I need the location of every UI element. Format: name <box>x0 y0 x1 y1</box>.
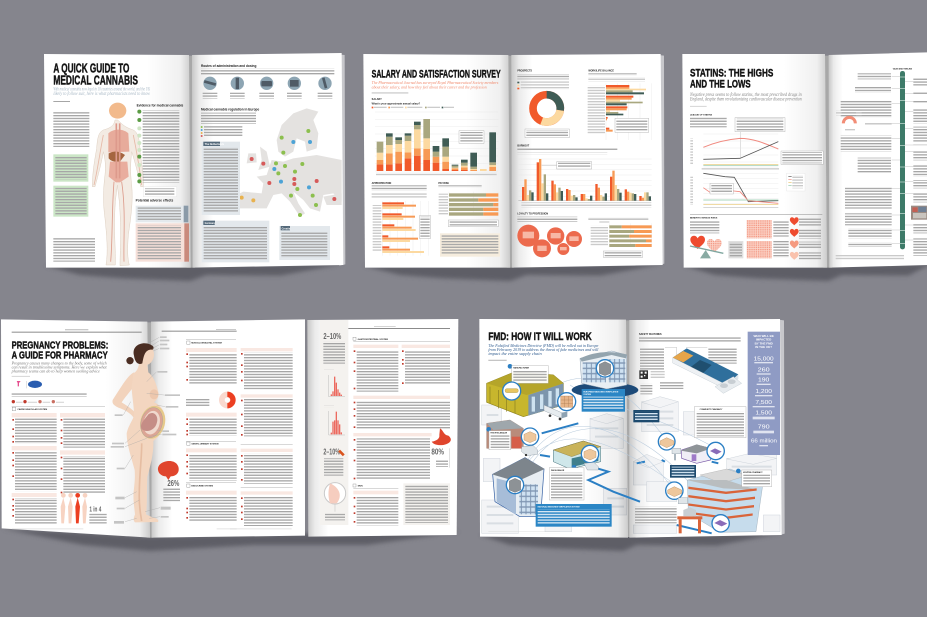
heartburn band <box>353 433 432 480</box>
brain icon <box>158 461 179 480</box>
stomach icon <box>432 428 451 445</box>
section rule <box>690 213 822 215</box>
callout: patent <box>710 183 733 194</box>
adverse box: serious <box>136 223 189 262</box>
feature text: anti tamper <box>686 347 737 364</box>
column 3 urinary <box>186 448 237 481</box>
subtitle: impact the entire supply chain <box>488 351 542 356</box>
green box: what is cannabis <box>53 154 88 182</box>
route icons <box>203 77 332 99</box>
subtitle <box>11 361 107 374</box>
references <box>635 507 677 523</box>
timeline connectors <box>892 77 913 243</box>
title: AND THE LOWS <box>690 79 751 91</box>
navy callout: hospital <box>670 465 696 478</box>
icon circle: pack hospital <box>712 515 729 532</box>
pay rise heading <box>438 182 482 188</box>
hospital building <box>687 469 763 532</box>
panel: germany <box>202 221 269 262</box>
stat: 80%: 80% <box>431 446 444 456</box>
column 4 <box>241 348 293 526</box>
icon: scales with hearts <box>690 236 723 258</box>
callout: appropriate pay <box>419 216 431 238</box>
icon circle: server 2 <box>506 476 524 494</box>
burnout heading <box>517 144 617 151</box>
callout: hospital pharmacy: HOSPITAL PHARMACY <box>743 471 763 474</box>
community pharmacy callout: COMMUNITY PHARMACY <box>700 408 723 411</box>
spread: pregnancy problems page three <box>307 319 458 537</box>
section: skin: SKIN <box>358 486 363 488</box>
timeline heading: TALES AND TIMELINE <box>893 67 913 70</box>
column 2 left <box>60 413 105 493</box>
column 2 bullets <box>61 419 62 493</box>
icon circle: server <box>596 360 614 377</box>
spine figures <box>61 493 87 523</box>
title: FMD: HOW IT WILL WORK <box>488 331 592 343</box>
spread: fmd how it will work <box>479 319 785 551</box>
salary legend <box>372 107 454 108</box>
wholesaler small building <box>487 420 523 448</box>
section: gastrointestinal <box>353 337 450 342</box>
grey stat box <box>728 241 743 258</box>
callout: guidance <box>735 118 785 158</box>
references box <box>403 483 450 525</box>
statin use intro <box>690 114 727 127</box>
pie caption <box>186 398 209 406</box>
pay rise stacked bars <box>439 192 498 216</box>
box: national verification: NATIONAL MEDICINES VERIFICATION SYSTEM <box>538 506 580 509</box>
stat: 2–10% second <box>323 447 345 476</box>
subtitle: With medical cannabis now legal in 10 countries around the world, and the UK <box>53 87 150 92</box>
evidence legend <box>143 187 177 197</box>
panel: who will be impacted: 1,200 <box>755 389 772 395</box>
byline <box>690 105 707 107</box>
stat: 26% <box>163 479 180 501</box>
adverse effects heading: Potential adverse effects <box>136 199 173 203</box>
illustration: pregnant woman <box>112 343 169 522</box>
evidence list <box>137 110 179 183</box>
subtitle: can result in troublesome symptoms. Here we explain what <box>12 365 107 370</box>
box: methodology <box>440 233 500 257</box>
gauge chart <box>836 111 862 131</box>
feature text: unique identifier <box>640 347 677 370</box>
panel: who will be impacted: WHO WILL BE <box>753 334 774 338</box>
icon circle: box 3 <box>658 433 675 450</box>
evidence heading: Evidence for medical cannabis <box>137 103 183 107</box>
pie chart 26% <box>219 392 236 408</box>
line chart legend <box>787 173 805 191</box>
title <box>690 67 773 91</box>
page stack edge <box>658 55 664 265</box>
callout: pay rise <box>448 220 498 227</box>
section: genito urinary <box>186 441 236 446</box>
column 1 left <box>12 413 57 525</box>
box: national verification <box>536 504 612 527</box>
circle illustration: belly <box>324 483 346 520</box>
spread: pregnancy problems pages one and two <box>1 319 460 551</box>
subtitle: England, despite them revolutionising cardiovascular disease prevention <box>689 98 802 103</box>
green box: cbd <box>53 186 88 217</box>
routes heading: Routes of administration and dosing <box>201 64 256 68</box>
icon circle: box <box>521 428 539 445</box>
section: skin <box>353 484 398 489</box>
box: european verification: SYSTEM <box>583 394 591 396</box>
intro text <box>12 392 87 397</box>
spread: statins the highs and the lows <box>682 52 927 281</box>
icon circle: box 4 <box>666 482 683 499</box>
footer page two <box>230 529 292 530</box>
histogram b <box>324 406 345 435</box>
van <box>522 446 538 456</box>
references <box>53 238 95 262</box>
panel: the netherlands: The Netherlands <box>205 143 225 146</box>
regulation heading: Medical cannabis regulation in Europe <box>201 107 259 111</box>
orange pavilion <box>677 507 702 533</box>
background city <box>482 397 780 533</box>
spread: salary and satisfaction survey <box>363 54 664 281</box>
recommend heading <box>588 217 648 223</box>
column 1 bullets <box>12 419 14 517</box>
map markers <box>240 129 336 217</box>
appropriate pay bar chart <box>373 201 428 256</box>
subtitle: Negative press seems to follow statins, the most prescribed drugs in <box>689 93 802 98</box>
title: STATINS: THE HIGHS <box>690 67 773 79</box>
qr captions <box>640 370 683 394</box>
adverse box: common <box>136 206 188 222</box>
delivery routes <box>517 378 718 533</box>
salary heading <box>372 98 421 105</box>
icon circle: box 2 <box>581 445 599 463</box>
safety features heading <box>639 333 741 343</box>
timeline bar <box>900 71 905 249</box>
stat: 2–10%: 2–10% <box>323 332 341 341</box>
callout: wholesaler <box>486 427 511 450</box>
panel: who will be impacted: 15,000 <box>754 356 774 362</box>
panel: the netherlands <box>202 142 240 215</box>
salary heading: SALARY <box>372 98 382 101</box>
callout: manufacturer <box>508 364 548 383</box>
work life bar chart <box>588 83 652 140</box>
work life balance heading: WORK/LIFE BALANCE <box>588 69 614 72</box>
van 4 <box>678 498 688 504</box>
subtitle: pharmacy teams can do to help women seeking advice <box>11 369 100 374</box>
byline <box>372 92 408 93</box>
work life balance heading <box>588 69 637 76</box>
panel: who will be impacted: 190 <box>758 377 769 383</box>
burnout heading: BURNOUT <box>517 144 530 147</box>
spread: a quick guide to medical cannabis: likely to follow suit, here is what pharmacists need to know <box>53 92 151 97</box>
sponsor logos <box>17 381 42 388</box>
safety features heading: SAFETY FEATURES <box>639 333 662 336</box>
title: A QUICK GUIDE TO <box>53 61 129 75</box>
callout: work life <box>615 118 649 132</box>
panel: croatia: Croatia <box>282 227 291 230</box>
subtitle: The Pharmaceutical Journal has surveyed Royal Pharmaceutical Society members <box>372 80 499 85</box>
dot grid captions <box>773 220 789 258</box>
section: endocrine: ENDOCRINE SYSTEM <box>191 486 213 488</box>
navy callout: community <box>633 410 659 422</box>
panel: who will be impacted: BY THE FMD <box>755 341 774 345</box>
body illustration <box>92 103 143 266</box>
prospects heading: PROSPECTS <box>517 70 532 73</box>
panel: who will be impacted: 1,500 <box>755 411 772 417</box>
title: SALARY AND SATISFACTION SURVEY <box>372 68 501 80</box>
header rule <box>12 328 237 333</box>
icon circle: pallet <box>558 393 576 411</box>
benefits heading: BENEFITS VERSUS RISKS <box>690 217 718 219</box>
appropriate pay heading <box>372 182 427 191</box>
header rule <box>348 325 450 329</box>
work life legend <box>588 77 645 82</box>
panel: who will be impacted: IMPACTED <box>756 338 772 342</box>
stat: 26%: 26% <box>167 479 179 488</box>
pharmacy shop <box>681 444 712 463</box>
panel: germany: Germany <box>205 222 216 225</box>
teal warehouse <box>553 441 601 469</box>
panel: who will be impacted <box>748 332 780 455</box>
loyalty heading: LOYALTY TO PROFESSION <box>517 213 548 216</box>
europe map <box>237 108 342 217</box>
heart icons <box>790 217 799 260</box>
subtitle: Pregnancy causes many changes to the body, some of which <box>11 361 107 367</box>
section: genito urinary: GENITO-URINARY SYSTEM <box>191 443 219 446</box>
subtitle: from February 2019 to address the threat of fake medicines and will <box>488 347 599 352</box>
bubble chart <box>517 225 582 257</box>
haemorrhoids band <box>353 396 450 429</box>
subtitle <box>488 343 599 356</box>
section: gastrointestinal: GASTROINTESTINAL SYSTEM <box>358 338 388 341</box>
stat: 2–10% <box>323 332 345 364</box>
icon circle: pack <box>503 382 521 400</box>
stat: 1 in 4: 1 in 4 <box>89 505 102 514</box>
legend <box>12 400 64 403</box>
callout: nice guidance <box>781 151 823 164</box>
map legend <box>201 126 242 137</box>
title: MEDICAL CANNABIS <box>53 73 138 87</box>
callout: hospital pharmacy <box>736 469 772 487</box>
callout: prospects <box>525 129 569 138</box>
anatomy labels <box>111 336 180 524</box>
manufacturer building <box>487 372 563 417</box>
stat: 1 in 4 <box>89 505 107 524</box>
subtitle: about their salary, and how they feel about their career and the profession <box>372 84 487 90</box>
title <box>12 340 108 361</box>
footer <box>488 532 560 533</box>
prospects legend <box>517 81 569 90</box>
ellipse plinth <box>572 382 638 398</box>
callout: recommend <box>603 251 643 257</box>
loyalty heading <box>517 213 577 222</box>
section: cardiovascular system <box>12 406 105 411</box>
statin use intro: LEAGUE OF STATINS <box>690 114 713 117</box>
column 3 bullets a <box>186 353 188 381</box>
column 3 back pain <box>186 348 237 385</box>
timeline photos <box>911 206 927 220</box>
byline <box>488 359 507 361</box>
skin column <box>353 491 398 525</box>
page stack edge <box>778 320 785 535</box>
line chart: prescriptions <box>690 134 779 170</box>
pay rise heading: PAY RISE <box>438 182 449 185</box>
gastro column 1 <box>353 345 398 392</box>
dot grid: 1000 people b <box>747 241 772 258</box>
qr code <box>639 370 648 379</box>
panel: who will be impacted: IN THE UK? <box>755 345 772 349</box>
intro text <box>53 100 89 147</box>
section: cardiovascular system: CARDIOVASCULAR SYSTEM <box>17 408 47 411</box>
title: PREGNANCY PROBLEMS: <box>12 340 108 351</box>
salary stacked bar chart <box>375 112 498 176</box>
histogram a <box>324 369 345 397</box>
box: european verification <box>582 389 625 412</box>
prospects heading <box>517 70 569 79</box>
timeline text right <box>913 78 927 256</box>
salary heading: What is your approximate annual salary? <box>372 102 421 105</box>
medicine pack <box>673 348 742 393</box>
stat: 80% <box>431 446 449 468</box>
column 4 bullets <box>241 353 243 520</box>
stat: 2–10% second: 2–10% <box>323 447 340 456</box>
icon circle: pack purple <box>707 442 724 460</box>
national verification building <box>492 458 545 517</box>
callout: burnout <box>542 162 592 169</box>
callout: wholesaler 2 <box>549 465 584 500</box>
recommend stacked bars <box>591 223 652 247</box>
benefits heading <box>690 217 719 233</box>
burnout legend <box>517 152 607 154</box>
side panel <box>320 320 348 525</box>
donut chart <box>533 95 560 122</box>
burnout bar chart <box>518 159 652 208</box>
panel: who will be impacted: 66 million <box>751 439 777 445</box>
community pharmacy callout <box>694 407 746 438</box>
callout: salary <box>459 131 484 143</box>
page stack edge <box>338 54 345 266</box>
dot grid: 1000 people a <box>747 220 772 238</box>
subtitle <box>372 80 499 90</box>
line chart: cost <box>690 173 778 208</box>
references <box>836 255 904 260</box>
heart captions <box>799 218 821 260</box>
column 3 diabetes <box>186 491 237 522</box>
callout: wholesaler 2: WHOLESALER <box>551 469 565 472</box>
spread: a quick guide to medical cannabis <box>44 53 345 281</box>
callout: wholesaler: THE WHOLESALER <box>490 432 508 435</box>
section: musculoskeletal: MUSCULOSKELETAL SYSTEM <box>191 342 222 345</box>
panel: who will be impacted: 7,500 <box>755 400 772 406</box>
title <box>53 61 138 87</box>
byline <box>12 375 30 377</box>
timeline text left <box>841 73 892 247</box>
routes text <box>201 69 334 75</box>
section: musculoskeletal <box>186 340 236 345</box>
subtitle: The Falsified Medicines Directive (FMD) will be rolled out in Europe <box>488 343 598 348</box>
column 3 symphysis <box>186 413 237 436</box>
box: european verification: EUROPEAN MEDICINES VERIFICATION <box>583 390 619 393</box>
appropriate pay heading: APPROPRIATION <box>372 182 392 185</box>
panel: croatia <box>279 226 330 260</box>
gastro column 2 <box>402 345 450 384</box>
van 3 <box>672 448 681 460</box>
title: A GUIDE FOR PHARMACY <box>12 350 108 361</box>
section: endocrine <box>186 483 236 488</box>
subtitle <box>689 93 802 103</box>
callout: manufacturer: MANUFACTURER <box>513 367 530 370</box>
panel: who will be impacted: 790 <box>758 424 770 430</box>
regulation text <box>201 113 256 124</box>
medicines verification office <box>580 351 627 389</box>
truck <box>544 405 567 420</box>
appropriate pay legend <box>372 192 427 199</box>
footer <box>12 529 237 530</box>
panel: who will be impacted: 260 <box>758 368 770 374</box>
van 2 <box>584 462 598 470</box>
